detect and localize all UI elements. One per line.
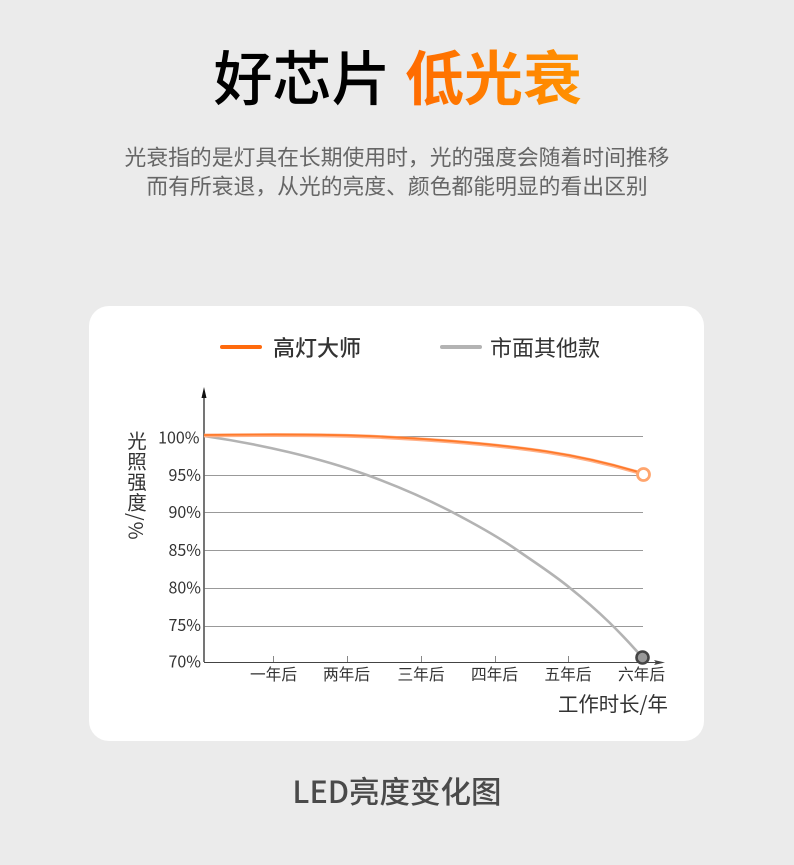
y axis labels: 100% xyxy=(158,424,200,448)
y axis labels: 75% xyxy=(168,612,201,636)
y axis title: 光照强度/% xyxy=(122,431,152,541)
title: 低光衰 xyxy=(405,32,582,117)
title: 好芯片 xyxy=(214,32,391,117)
y axis labels: 70% xyxy=(168,648,201,672)
x axis labels: 两年后 xyxy=(323,662,370,685)
description text: 而有所衰退，从光的亮度、颜色都能明显的看出区别 xyxy=(146,170,648,201)
description text xyxy=(125,141,669,201)
grey curve: other products xyxy=(204,436,648,664)
y axis labels: 85% xyxy=(168,537,201,561)
y axis labels: 90% xyxy=(168,499,201,523)
title xyxy=(214,32,582,117)
x axis labels: 三年后 xyxy=(397,662,445,685)
panel: chart card xyxy=(89,306,704,741)
x axis labels: 六年后 xyxy=(618,662,665,685)
x axis labels: 五年后 xyxy=(544,662,592,685)
x axis labels: 四年后 xyxy=(471,662,518,685)
caption: LED亮度变化图 xyxy=(292,768,502,812)
x axis labels xyxy=(250,662,665,685)
legend: 市面其他款 xyxy=(440,331,600,363)
y axis labels: 95% xyxy=(168,462,201,486)
grid lines xyxy=(204,436,643,626)
orange curve: 高灯大师 xyxy=(204,435,650,480)
y axis labels xyxy=(158,424,201,672)
description text: 光衰指的是灯具在长期使用时，光的强度会随着时间推移 xyxy=(125,141,669,172)
legend: 高灯大师 xyxy=(220,331,361,363)
y axis with arrow xyxy=(202,387,206,662)
legend: 高灯大师: 高灯大师 xyxy=(273,331,361,363)
x axis with arrow xyxy=(204,656,665,665)
y axis labels: 80% xyxy=(168,574,201,598)
x axis title: 工作时长/年 xyxy=(558,688,668,718)
legend: 市面其他款: 市面其他款 xyxy=(490,331,600,363)
x axis labels: 一年后 xyxy=(250,662,297,685)
